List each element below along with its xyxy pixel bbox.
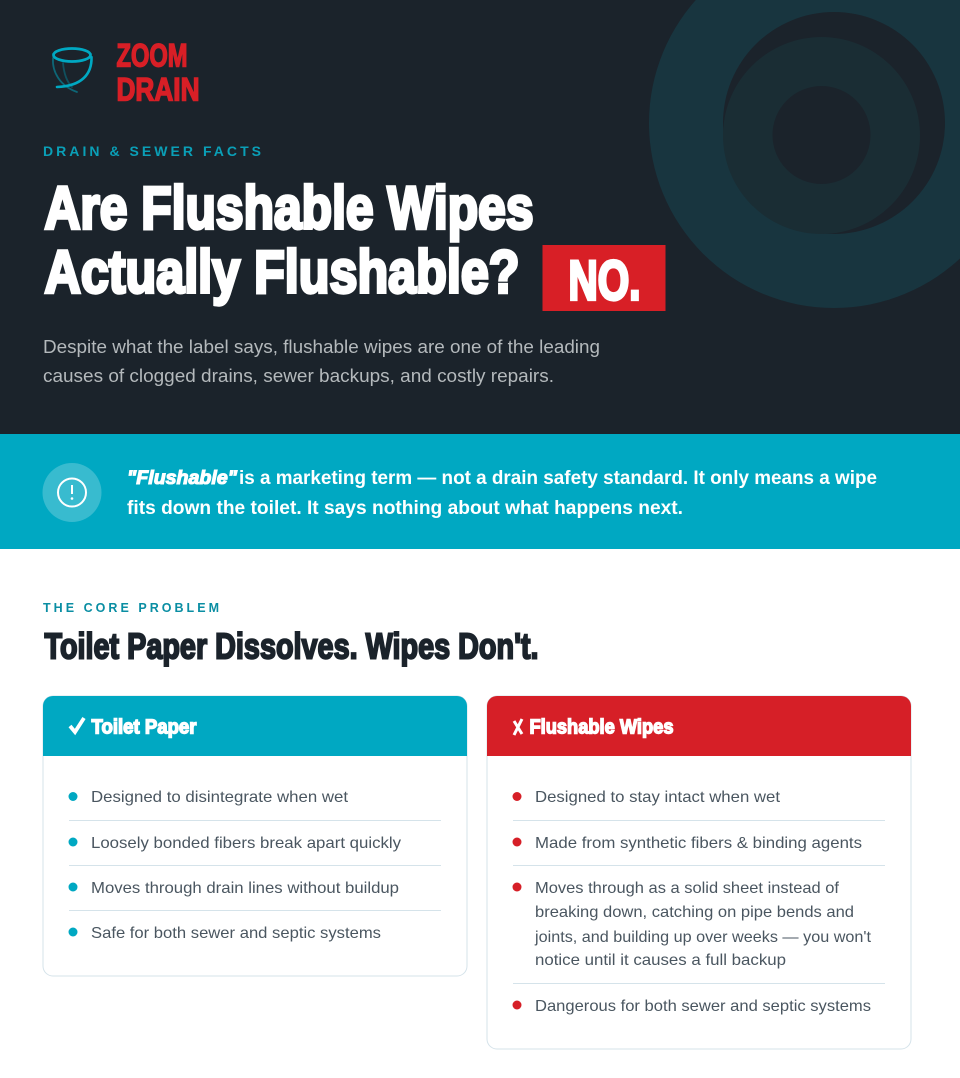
callout text: "Flushable" — [127, 468, 238, 489]
logo wordmark: DRAIN — [116, 72, 200, 108]
panel: callout band — [0, 434, 960, 549]
list items: Designed to stay intact when wet — [535, 789, 781, 806]
panel: flushable wipes card — [487, 696, 911, 1049]
card header: Flushable Wipes — [530, 716, 674, 738]
list items: Designed to disintegrate when wet — [91, 789, 349, 806]
list items: Safe for both sewer and septic systems — [91, 925, 381, 942]
list items: Loosely bonded fibers break apart quickly — [91, 835, 401, 852]
icon: exclamation — [42, 463, 102, 522]
subtitle: causes of clogged drains, sewer backups, and costly repairs. — [43, 366, 554, 386]
list items: Dangerous for both sewer and septic systems — [535, 998, 871, 1015]
decorative concentric rings — [649, 0, 960, 308]
panel: toilet paper card — [43, 696, 467, 976]
logo wordmark — [116, 38, 200, 108]
card header — [487, 696, 911, 756]
kicker: DRAIN & SEWER FACTS — [43, 143, 261, 159]
subtitle — [43, 337, 600, 386]
icon: Zoom Drain logo mark — [53, 48, 92, 92]
callout text — [127, 468, 877, 519]
list items: Moves through as a solid sheet instead of — [535, 880, 840, 897]
list items: Moves through drain lines without buildup — [91, 880, 399, 897]
list items — [512, 789, 885, 1015]
title: Actually Flushable? — [44, 238, 520, 306]
card header — [43, 696, 467, 756]
list items: breaking down, catching on pipe bends and — [535, 904, 854, 921]
list items: joints, and building up over weeks — you won't — [534, 929, 872, 946]
section heading: Toilet Paper Dissolves. Wipes Don't. — [44, 626, 538, 666]
list items: notice until it causes a full backup — [535, 952, 786, 969]
title — [44, 174, 534, 306]
panel: header — [0, 0, 960, 434]
list items: Made from synthetic fibers & binding agents — [535, 835, 862, 852]
logo wordmark: ZOOM — [116, 38, 188, 74]
title: Are Flushable Wipes — [44, 174, 534, 242]
NO badge: NO. — [568, 248, 640, 312]
subtitle: Despite what the label says, flushable wipes are one of the leading — [43, 337, 600, 357]
list items — [68, 789, 441, 942]
section label: THE CORE PROBLEM — [43, 601, 219, 615]
callout text: is a marketing term — not a drain safety standard. It only means a wipe — [239, 468, 877, 489]
card header: Toilet Paper — [92, 716, 197, 738]
callout text: fits down the toilet. It says nothing about what happens next. — [127, 498, 683, 519]
